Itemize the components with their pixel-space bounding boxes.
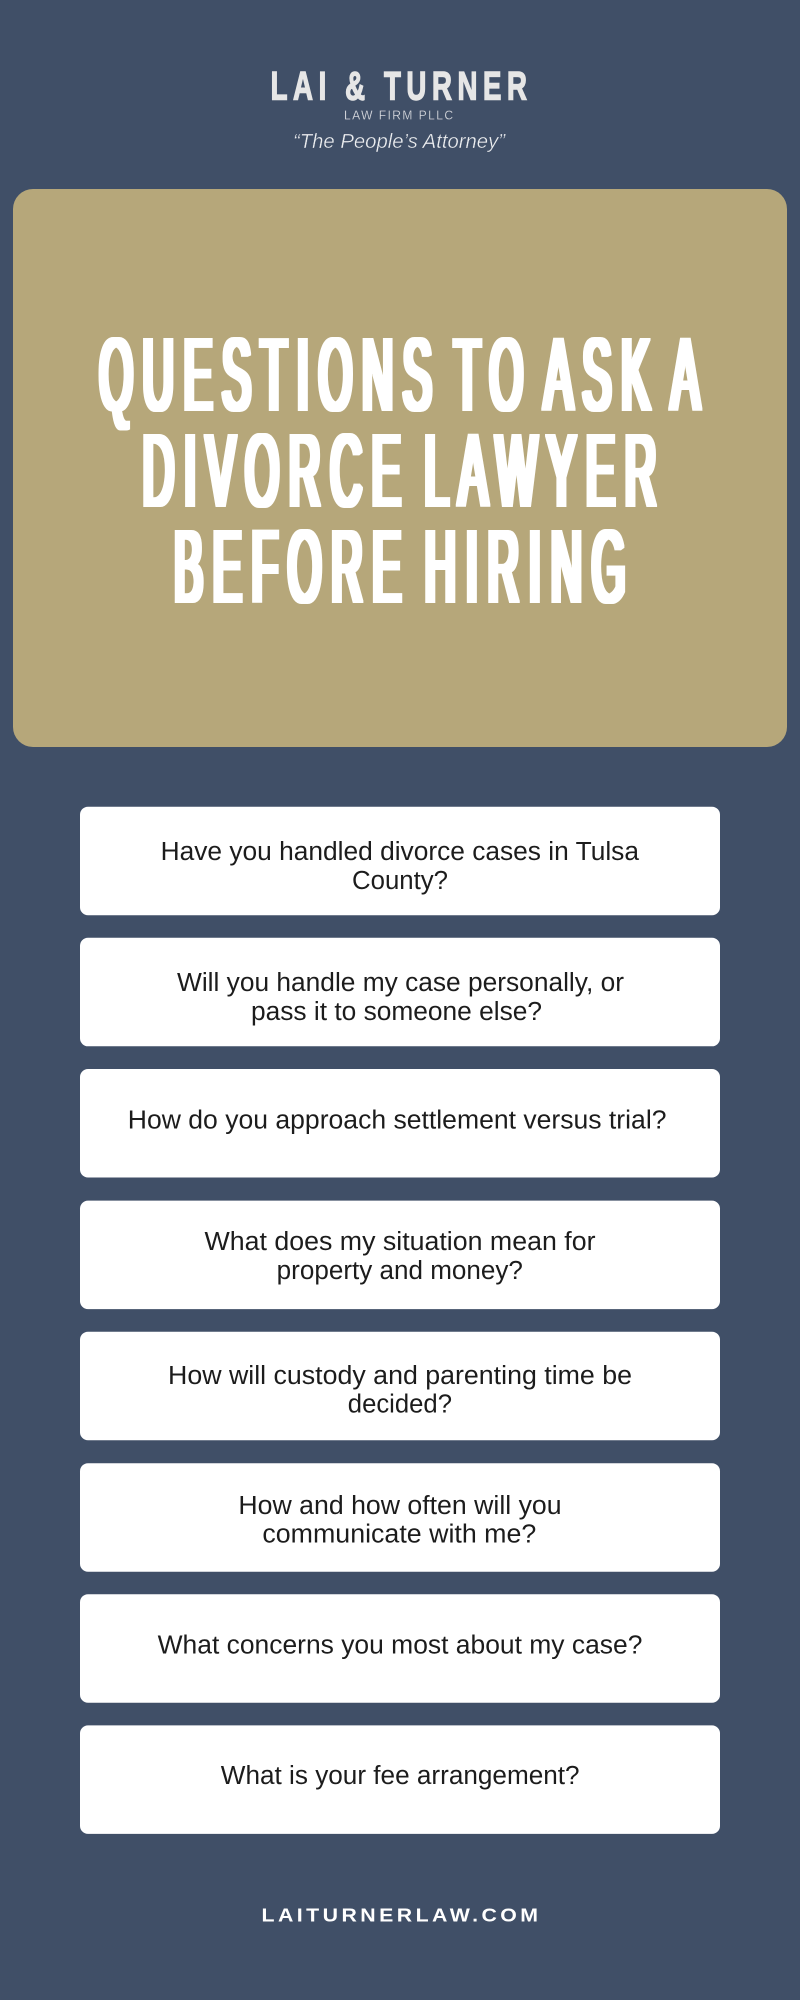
card 2 [80,938,720,1046]
card 5: How will custody and parenting time be [168,1362,632,1390]
card 4: What does my situation mean for [204,1228,596,1256]
card 1: Have you handled divorce cases in Tulsa [161,838,640,866]
title panel [13,189,787,747]
question cards [80,807,720,1834]
tagline: “The People’s Attorney” [293,131,506,153]
card 7 [80,1594,720,1703]
card 6: How and how often will you [238,1492,562,1520]
card 6: communicate with me? [262,1521,536,1549]
card 2: Will you handle my case personally, or [177,969,625,997]
logo header [271,64,533,153]
card 5: decided? [348,1391,452,1419]
card 8 [80,1725,720,1834]
card 4: property and money? [277,1257,523,1285]
logo subtitle: LAW FIRM PLLC [344,107,454,122]
card 1: County? [352,867,448,895]
card 7: What concerns you most about my case? [158,1631,642,1659]
card 6 [80,1463,720,1572]
card 4 [80,1201,720,1309]
card 3 [80,1069,720,1178]
card 5 [80,1332,720,1440]
title [100,317,710,624]
card 1 [80,807,720,915]
card 3: How do you approach settlement versus trial? [128,1106,667,1134]
logo wordmark: LAI & TURNER [271,64,533,108]
card 2: pass it to someone else? [251,998,542,1026]
card 8: What is your fee arrangement? [221,1762,580,1790]
footer website: LAITURNERLAW.COM [262,1905,542,1926]
